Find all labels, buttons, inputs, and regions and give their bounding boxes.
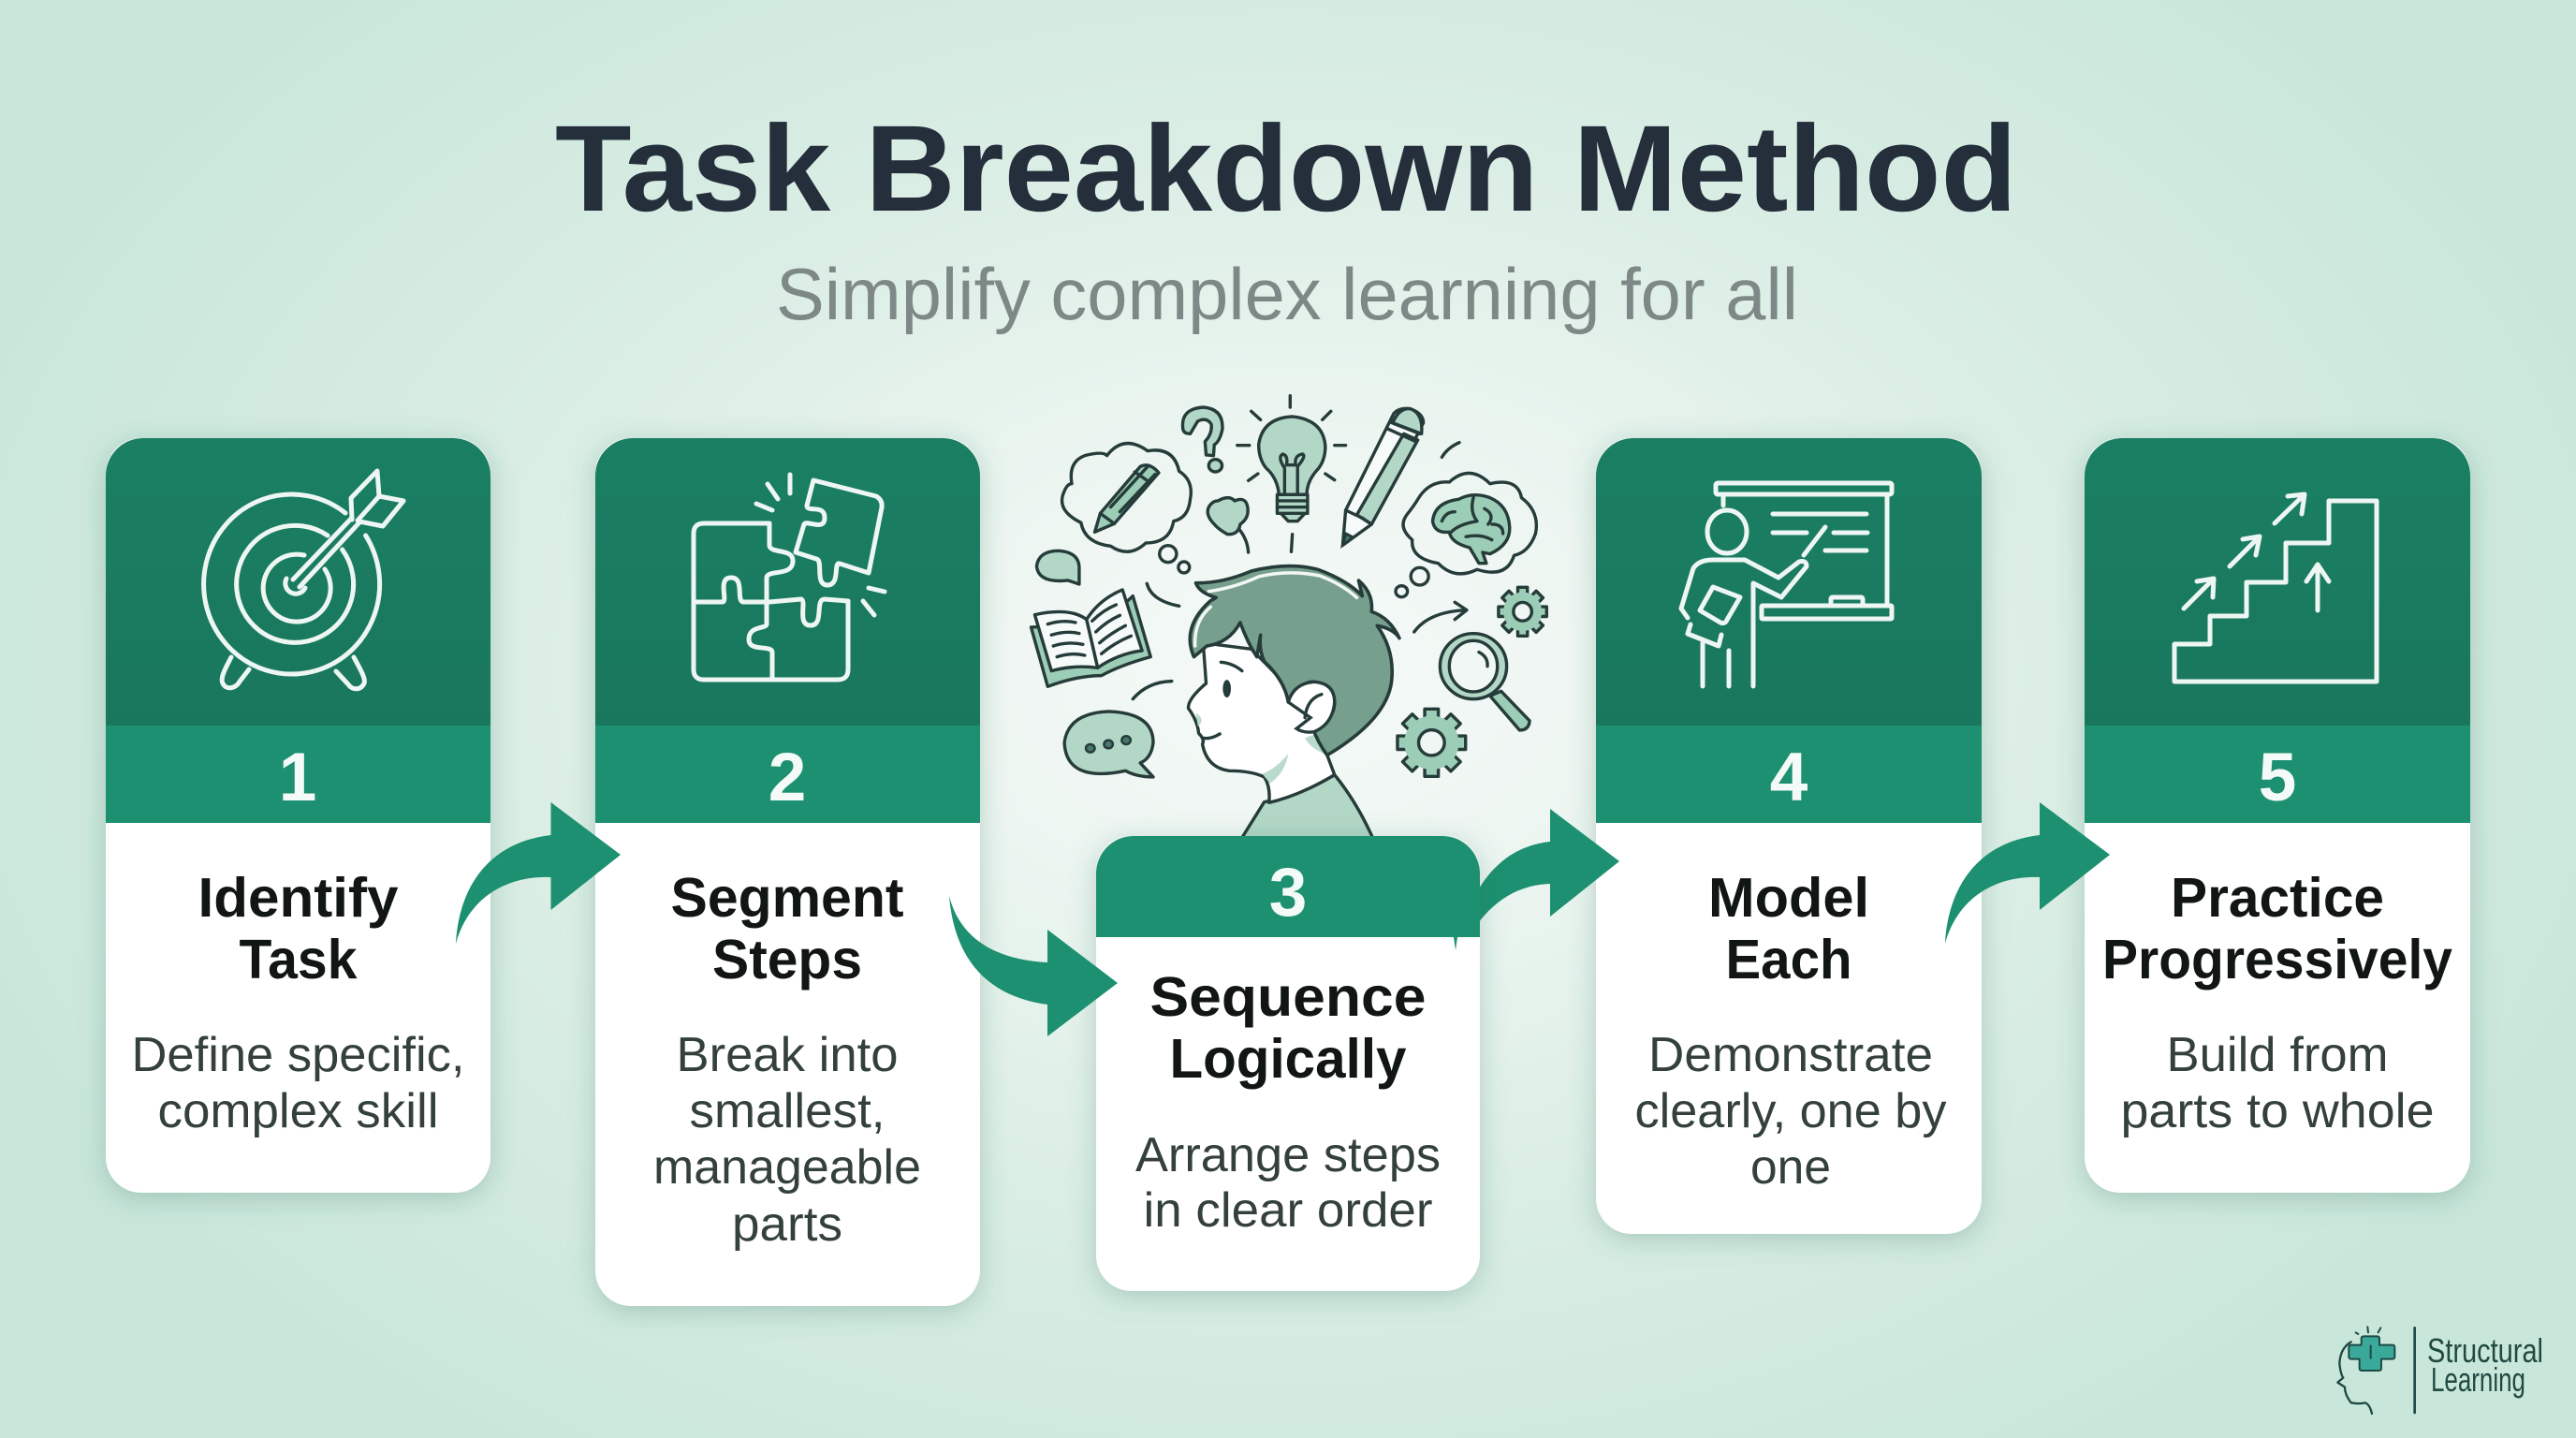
- step title: Steps: [712, 929, 862, 990]
- question hook: [1182, 407, 1222, 456]
- step title: Model: [1708, 867, 1869, 929]
- panel: step 5 practice progressively: [2085, 438, 2470, 1193]
- step description: [2121, 1028, 2434, 1138]
- arrow: step 2 to step 3: [949, 896, 1118, 1036]
- cover: [1032, 596, 1150, 686]
- question dot: [1208, 460, 1222, 472]
- arrow: step 4 to step 5: [1945, 802, 2110, 944]
- small blob: [1208, 498, 1249, 552]
- pencil lead: [1342, 534, 1354, 545]
- step description: [653, 1028, 921, 1252]
- step description: complex skill: [157, 1084, 438, 1138]
- lens ring: [1440, 634, 1507, 699]
- pencil lines: [1100, 466, 1155, 523]
- panel: step 2 segment steps: [595, 438, 980, 1306]
- filament and rays: [1237, 396, 1346, 551]
- small gear: [1499, 587, 1546, 636]
- handle: [1490, 691, 1530, 730]
- step description: manageable: [653, 1140, 921, 1195]
- central illustration: child thinking: [1032, 396, 1546, 840]
- eyebrow: [1221, 662, 1242, 671]
- card body: [595, 438, 980, 1306]
- step title: Practice: [2171, 867, 2384, 929]
- logo mark: [2337, 1327, 2415, 1414]
- divider: [2411, 1328, 2419, 1413]
- thought cloud with pencil: [1062, 444, 1191, 573]
- panel: step 3 sequence logically: [1096, 836, 1480, 1291]
- pencil tip and bands: [1346, 423, 1420, 524]
- step title: Each: [1726, 929, 1852, 990]
- step title: [198, 867, 399, 990]
- dots: [1086, 736, 1131, 753]
- large pencil: [1342, 408, 1424, 545]
- pencil body: [1342, 408, 1424, 545]
- logo: Structural Learning: [2337, 1327, 2543, 1414]
- left page: [1034, 611, 1098, 671]
- step description: clearly, one by: [1634, 1084, 1947, 1138]
- lens glint: [1479, 653, 1487, 667]
- header: [2085, 438, 2470, 726]
- step description: [1634, 1028, 1947, 1195]
- step title: [2102, 867, 2452, 990]
- step description: Break into: [676, 1028, 899, 1082]
- logo text: [2427, 1331, 2543, 1399]
- icon: teacher at board: [1681, 483, 1892, 686]
- brain folds: [1442, 498, 1503, 540]
- step title: [1149, 966, 1427, 1090]
- icon: puzzle pieces: [694, 475, 885, 680]
- thought bubbles: [1396, 567, 1428, 597]
- small tick: [1442, 443, 1459, 457]
- gear hub: [1514, 602, 1531, 621]
- step title: [1708, 867, 1869, 990]
- hair highlight: [1195, 573, 1356, 646]
- ear: [1288, 682, 1335, 732]
- panel: step 4 model each: [1596, 438, 1982, 1234]
- number band: [1096, 836, 1480, 937]
- bulb glass: [1259, 417, 1325, 494]
- hair: [1190, 566, 1399, 756]
- step title: Progressively: [2102, 929, 2452, 990]
- open book: [1032, 590, 1150, 686]
- header: [595, 438, 980, 726]
- arrow tail sliver: step 3: [1454, 937, 1457, 950]
- head profile: [2337, 1342, 2372, 1414]
- icon: staircase with arrows: [2174, 494, 2377, 682]
- number band: [595, 726, 980, 823]
- small curved arrow: [1414, 602, 1467, 632]
- step title: Sequence: [1149, 966, 1427, 1028]
- number band: [106, 726, 490, 823]
- subtitle: Simplify complex learning for all: [776, 253, 1798, 335]
- thought bubbles: [1160, 546, 1190, 573]
- rays: [2356, 1327, 2380, 1334]
- ear detail: [1305, 695, 1322, 718]
- step description: smallest,: [689, 1084, 886, 1138]
- card body: [1596, 438, 1982, 1234]
- mouth: [1203, 734, 1220, 739]
- pencil shading: [1356, 409, 1422, 524]
- bulb base: [1277, 494, 1308, 521]
- face: [1189, 643, 1335, 802]
- number band: [1596, 726, 1982, 823]
- number: 5: [2259, 740, 2296, 815]
- teeth: [1499, 587, 1546, 636]
- arrow: step 1 to step 2: [456, 802, 621, 944]
- step title: Task: [240, 929, 358, 990]
- card body: [1096, 836, 1480, 1291]
- teeth: [1398, 709, 1466, 776]
- number band: [2085, 726, 2470, 823]
- header: [106, 438, 490, 726]
- logo text: Structural: [2427, 1331, 2543, 1370]
- blob shape: [1208, 498, 1248, 535]
- title: Task Breakdown Method: [555, 99, 2017, 237]
- icon: target with arrow: [204, 471, 403, 689]
- magnifying glass: [1440, 634, 1530, 730]
- step title: Identify: [198, 867, 399, 929]
- number: 4: [1770, 740, 1808, 815]
- blocks: [2349, 1336, 2394, 1371]
- page lines: [1047, 605, 1131, 657]
- header: [1596, 438, 1982, 726]
- number: 3: [1269, 855, 1307, 931]
- number: 1: [279, 740, 316, 815]
- brain: [1433, 495, 1510, 564]
- gear hub: [1419, 730, 1444, 756]
- cloud: [1062, 444, 1191, 551]
- card body: [2085, 438, 2470, 1193]
- bubble: [1064, 712, 1153, 777]
- gear body: [1503, 593, 1542, 631]
- step title: Logically: [1170, 1028, 1407, 1090]
- curved marks: [1133, 583, 1179, 699]
- neck shadow: [1195, 713, 1327, 784]
- step description: in clear order: [1144, 1183, 1432, 1238]
- question mark: [1182, 407, 1222, 472]
- step description: Demonstrate: [1648, 1028, 1933, 1082]
- eye: [1222, 680, 1231, 697]
- step description: parts to whole: [2121, 1084, 2434, 1138]
- shirt: [1241, 775, 1373, 840]
- step description: parts: [732, 1197, 842, 1252]
- logo text: Learning: [2431, 1360, 2525, 1399]
- step description: [131, 1028, 464, 1138]
- step title: Segment: [670, 867, 904, 929]
- card body: [106, 438, 490, 1193]
- step description: Arrange steps: [1135, 1128, 1441, 1182]
- panel: step 1 identify task: [106, 438, 490, 1193]
- blob stem: [1239, 530, 1249, 552]
- step title: [670, 867, 904, 990]
- step description: Build from: [2166, 1028, 2389, 1082]
- large speech bubble: [1064, 712, 1153, 777]
- step description: Define specific,: [131, 1028, 464, 1082]
- thought cloud with brain: [1396, 473, 1536, 597]
- small pencil: [1095, 465, 1159, 532]
- cloud: [1403, 473, 1536, 574]
- number: 2: [768, 740, 806, 815]
- step description: one: [1750, 1140, 1831, 1195]
- large gear: [1398, 709, 1466, 776]
- light bulb: [1237, 396, 1346, 551]
- gear body: [1404, 715, 1458, 770]
- arrow: step 3 to step 4: [1456, 809, 1619, 950]
- step description: [1135, 1128, 1441, 1238]
- small speech bubble: [1036, 550, 1079, 584]
- right page: [1087, 590, 1142, 668]
